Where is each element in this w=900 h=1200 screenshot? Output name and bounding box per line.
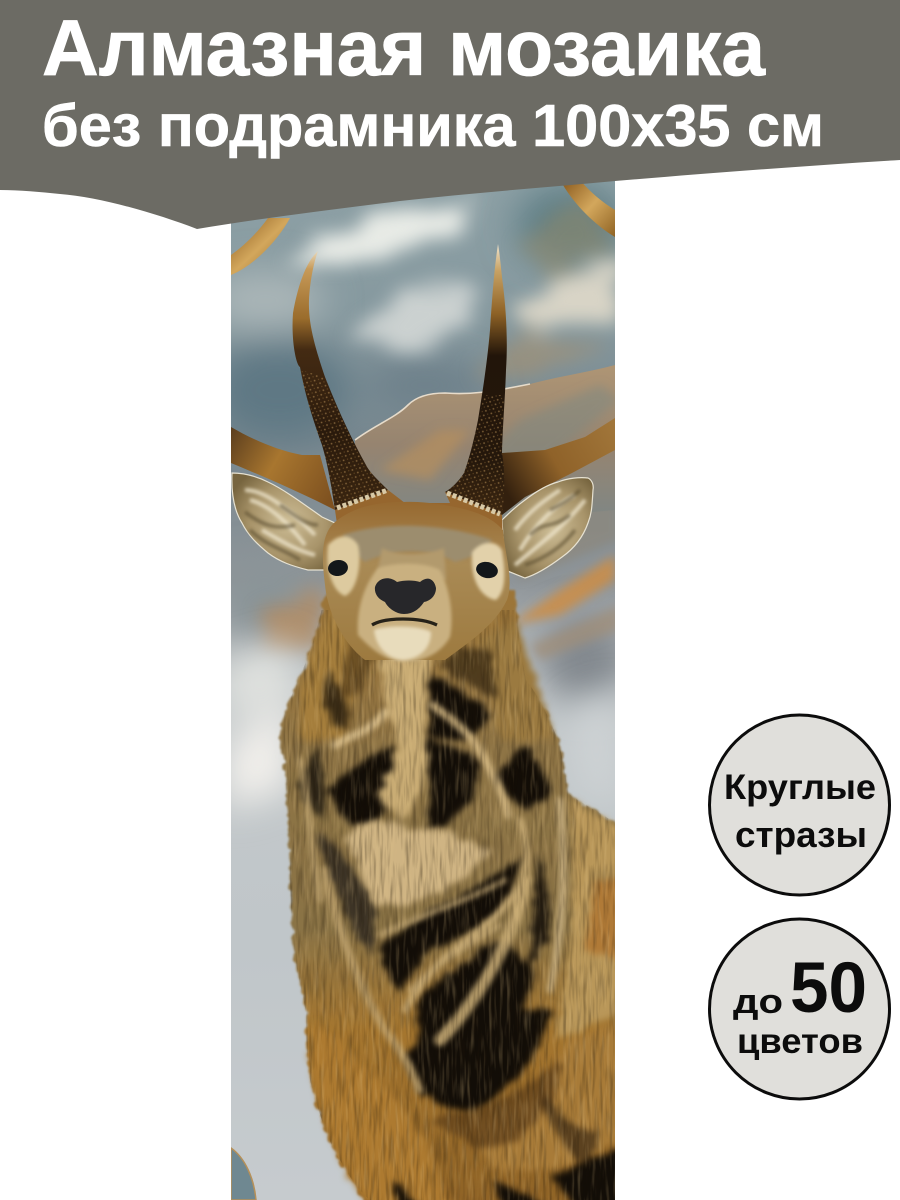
badge: up to 50 colours: цветов xyxy=(737,1022,863,1061)
left eye xyxy=(328,560,348,576)
antler burrs xyxy=(337,490,500,514)
title line 1: Алмазная мозаика xyxy=(42,3,766,92)
mane silhouette xyxy=(280,590,625,1200)
badge: round rhinestones: стразы xyxy=(735,814,867,855)
header band xyxy=(0,0,900,229)
nose bridge xyxy=(376,548,446,580)
stag body and mane xyxy=(277,588,615,1200)
badge: round rhinestones xyxy=(710,715,890,895)
picture: stag portrait xyxy=(231,181,615,1200)
small feather bottom-left xyxy=(231,1148,256,1200)
mountain ridge xyxy=(355,365,620,520)
right main antler with tine xyxy=(445,244,615,515)
mouth line xyxy=(372,619,437,625)
corner antler top-right xyxy=(563,180,615,237)
right ear xyxy=(502,478,593,578)
flowing hair strands xyxy=(300,705,563,1090)
nose xyxy=(375,578,436,614)
badge: round rhinestones: Круглые xyxy=(724,768,876,807)
left ear xyxy=(232,473,335,570)
sky background xyxy=(231,181,615,1200)
right eye patch xyxy=(472,543,504,600)
muzzle xyxy=(358,564,452,662)
badge: up to 50 colours: 50 xyxy=(790,949,867,1028)
left main antler with tine xyxy=(231,251,388,510)
badge: up to 50 colours: до xyxy=(733,983,783,1021)
face xyxy=(323,502,510,660)
light fur patches xyxy=(345,655,492,907)
right eye xyxy=(476,562,498,578)
badge: up to 50 colours xyxy=(710,919,890,1099)
pedicles and forehead crown xyxy=(335,490,502,530)
stag head xyxy=(323,490,510,662)
shoulder and chest tones xyxy=(300,610,625,1200)
title line 2: без подрамника 100х35 см xyxy=(42,93,824,159)
dark fur patches xyxy=(298,630,625,1200)
fine fur texture xyxy=(282,610,615,1200)
forehead fur xyxy=(343,526,492,562)
corner antler top-left xyxy=(231,218,290,275)
left eye patch xyxy=(327,536,359,596)
chin xyxy=(374,626,431,660)
